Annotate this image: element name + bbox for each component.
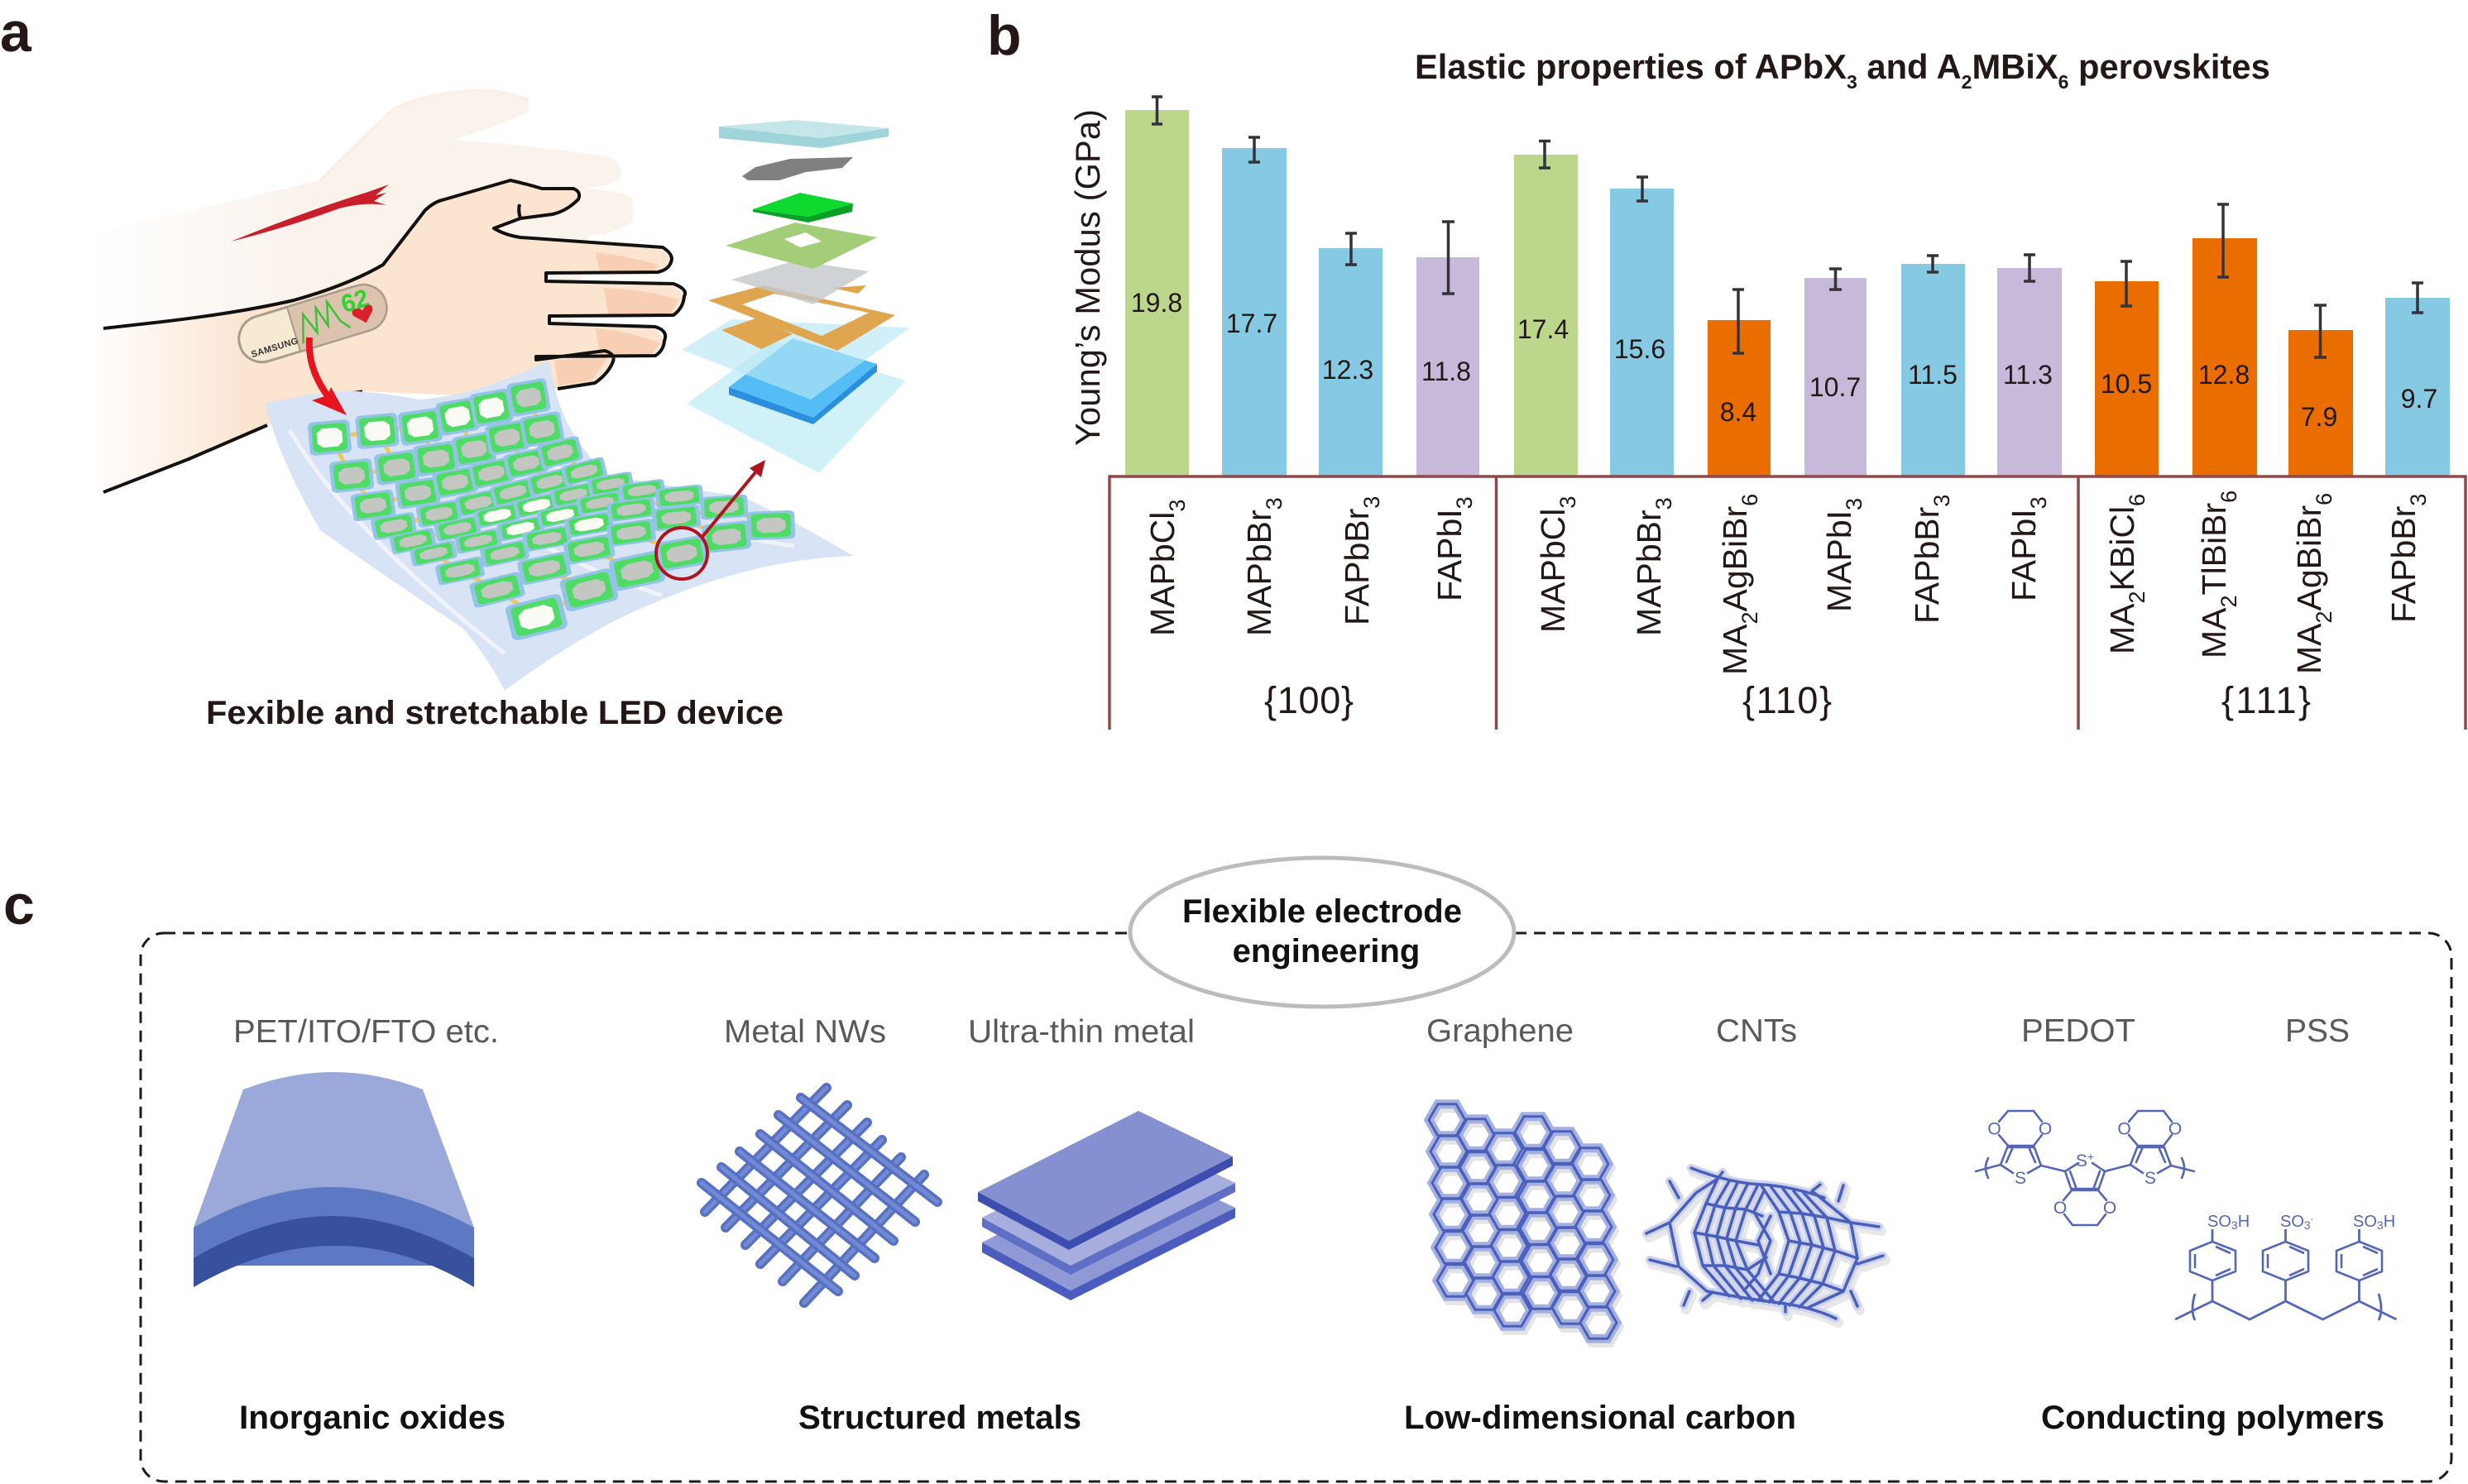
red arrow to exploded view [702, 460, 765, 538]
compound labels: FAPbBr [2384, 506, 2422, 623]
panel a: flexible and stretchable LED device [91, 90, 910, 731]
chart title: perovskites [2068, 47, 2270, 86]
value labels: 15.6 [1614, 334, 1665, 364]
compound labels: FAPbBr [1338, 509, 1376, 625]
compound labels: 3 [1165, 500, 1190, 512]
compound labels: MA [2195, 607, 2233, 658]
panel label a: a [0, 1, 32, 64]
compound labels: FAPbI [2005, 509, 2043, 601]
central ellipse heading: engineering [1233, 933, 1420, 969]
compound labels: AgBiBr [2290, 505, 2328, 610]
material subtitles: Metal NWs [724, 1014, 886, 1050]
exploded LED layer stack [682, 120, 910, 473]
chart title: 3 [1847, 71, 1857, 93]
icon: PSS chemical structure: SO [2280, 1213, 2304, 1231]
compound labels: 3 [2026, 496, 2051, 509]
material subtitles: CNTs [1716, 1013, 1797, 1049]
panel b: elastic properties bar chart [1068, 47, 2466, 730]
material subtitles: PET/ITO/FTO etc. [233, 1014, 499, 1050]
bars [1125, 110, 2450, 476]
compound labels: 6 [1737, 494, 1762, 506]
material subtitles: PEDOT [2021, 1013, 2135, 1049]
compound labels: 2 [2216, 595, 2241, 607]
compound labels: TlBiBr [2195, 503, 2233, 595]
error bars [1152, 97, 2423, 357]
compound labels: MAPbCl [1143, 512, 1181, 636]
panel label b: b [987, 4, 1022, 67]
icon: PSS chemical structure [2175, 1213, 2396, 1320]
icon: bent inorganic oxide layers [194, 1072, 474, 1287]
crystal facet labels: {100} [1264, 679, 1354, 721]
icon: carbon nanotube [1646, 1168, 1886, 1323]
category captions: Inorganic oxides [239, 1400, 506, 1436]
compound labels: 6 [2216, 491, 2241, 503]
red circle around single LED cell [656, 528, 707, 579]
chart title: 6 [2058, 71, 2068, 93]
crystal facet labels: {111} [2221, 679, 2311, 721]
compound labels: MAPbBr [1240, 510, 1278, 636]
category captions: Low-dimensional carbon [1404, 1400, 1796, 1436]
compound labels: 3 [1359, 496, 1384, 509]
material subtitles [233, 1013, 2350, 1050]
icon: PEDOT chemical structure: O [2053, 1199, 2067, 1218]
icon: PSS chemical structure: - [2311, 1215, 2313, 1224]
compound labels: MAPbBr [1630, 510, 1668, 636]
central ellipse heading [1130, 858, 1514, 1007]
value labels: 9.7 [2401, 384, 2437, 414]
compound labels: 3 [1262, 497, 1287, 510]
compound labels: 3 [1929, 495, 1954, 507]
compound labels: 2 [1737, 611, 1762, 624]
icon: PSS chemical structure: 3 [2304, 1218, 2311, 1232]
compound labels: MA [2290, 624, 2328, 674]
dashed frame [141, 933, 2451, 1482]
compound labels: 3 [1452, 496, 1477, 509]
value labels: 10.7 [1809, 372, 1861, 402]
chart title: MBiX [1972, 47, 2058, 86]
panel a caption: Fexible and stretchable LED device [206, 695, 784, 731]
category axis frame [1109, 476, 2466, 730]
value labels: 12.3 [1322, 355, 1373, 385]
compound labels: MAPbI [1820, 510, 1858, 612]
compound labels: 3 [2406, 494, 2431, 506]
icon: graphene honeycomb [1429, 1104, 1619, 1343]
wearable patch with heart rate display: 62 [338, 285, 372, 318]
compound labels [1143, 491, 2431, 675]
icon: PSS chemical structure: H [2238, 1213, 2250, 1231]
chart title: and A [1857, 47, 1962, 86]
value labels: 17.4 [1517, 314, 1569, 344]
category captions [239, 1400, 2384, 1436]
red curved arrow from patch to sheet [309, 337, 347, 415]
icon: PEDOT chemical structure: O [2103, 1199, 2116, 1218]
red vein on hand [231, 184, 389, 242]
compound labels: 6 [2125, 494, 2149, 506]
icon: PSS chemical structure: H [2384, 1213, 2395, 1231]
material subtitles: PSS [2285, 1013, 2350, 1049]
flexible LED sheet [265, 360, 853, 691]
icon: PEDOT chemical structure [1976, 1111, 2194, 1225]
compound labels: AgBiBr [1716, 506, 1754, 611]
icon: metal nanowire mesh [702, 1088, 937, 1303]
value labels: 12.8 [2198, 360, 2250, 390]
value labels: 10.5 [2101, 369, 2152, 399]
y axis label: Young’s Modus (GPa) [1068, 109, 1107, 446]
material subtitles: Ultra-thin metal [968, 1014, 1195, 1050]
wearable patch with heart rate display: SAMSUNG [250, 336, 300, 360]
front hand and wrist [91, 180, 685, 496]
compound labels: 3 [1651, 497, 1676, 510]
compound labels: KBiCl [2103, 506, 2141, 591]
category captions: Conducting polymers [2041, 1400, 2384, 1436]
crystal facet labels: {110} [1742, 679, 1832, 721]
compound labels: 3 [1555, 496, 1580, 509]
icon: stacked ultra-thin metal sheets [978, 1111, 1235, 1300]
icon: PSS chemical structure: SO [2207, 1213, 2231, 1231]
crystal facet labels [1264, 679, 2311, 721]
compound labels: FAPbBr [1908, 507, 1946, 624]
value labels: 17.7 [1226, 309, 1277, 338]
compound labels: FAPbI [1430, 509, 1469, 601]
value labels: 11.3 [2003, 360, 2053, 390]
value labels: 11.5 [1908, 360, 1958, 390]
value labels: 7.9 [2301, 402, 2337, 432]
compound labels: 6 [2312, 493, 2336, 505]
material subtitles: Graphene [1426, 1013, 1574, 1049]
compound labels: MAPbCl [1534, 509, 1572, 633]
value labels [1131, 288, 2437, 432]
compound labels: 2 [2125, 591, 2149, 604]
faded raised hand [91, 90, 634, 414]
value labels: 11.8 [1421, 357, 1471, 386]
chart title: 2 [1962, 71, 1972, 93]
icon: PEDOT chemical structure: S [2076, 1151, 2087, 1170]
icon: PSS chemical structure: 3 [2231, 1218, 2238, 1232]
compound labels: MA [2103, 604, 2141, 654]
central ellipse heading: Flexible electrode [1182, 893, 1462, 930]
wearable patch with heart rate display [233, 279, 392, 368]
icon: PSS chemical structure: SO [2353, 1213, 2377, 1231]
value labels: 19.8 [1131, 288, 1182, 318]
icon: PEDOT chemical structure: + [2087, 1150, 2094, 1163]
compound labels: 2 [2312, 610, 2336, 624]
value labels: 8.4 [1720, 397, 1756, 427]
icon: PSS chemical structure: 3 [2377, 1218, 2384, 1232]
category captions: Structured metals [798, 1400, 1081, 1436]
panel label c: c [3, 874, 35, 936]
compound labels: 3 [1842, 498, 1867, 510]
panel c: flexible electrode engineering [141, 858, 2451, 1482]
chart title: Elastic properties of APbX [1415, 47, 1847, 86]
compound labels: MA [1716, 624, 1754, 675]
